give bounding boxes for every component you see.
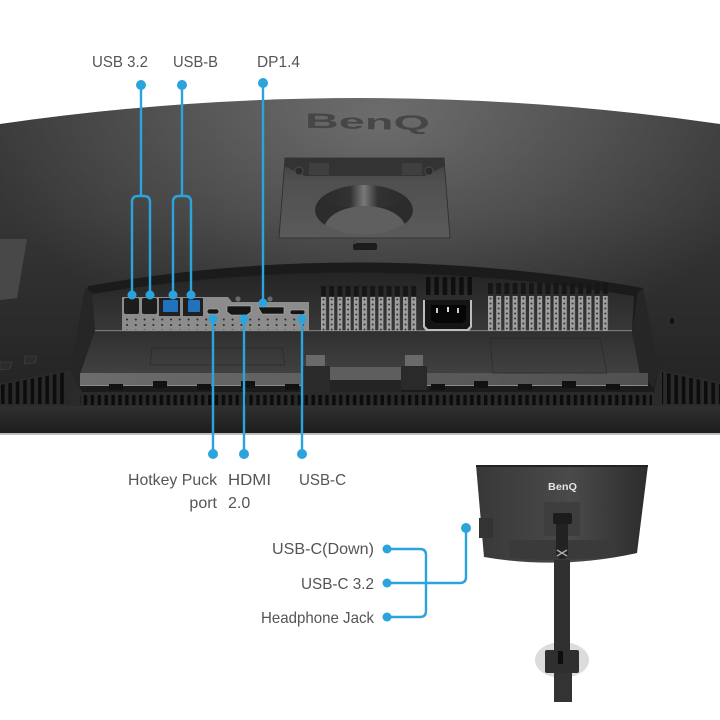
HDMI port (227, 306, 251, 315)
port plate (122, 296, 309, 331)
label: USB-C: USB-C (299, 472, 346, 489)
side port panel (479, 518, 493, 538)
main monitor rear view (0, 98, 720, 435)
VESA mount recess (279, 158, 450, 254)
USB-C port (290, 310, 305, 314)
connector: DP1.4 (258, 78, 268, 308)
label: Hotkey Puck port: Hotkey Puck (128, 472, 218, 489)
label: USB 3.2: USB 3.2 (92, 54, 148, 71)
mini stand bracket (544, 502, 580, 536)
top port labels (92, 54, 300, 71)
label: Headphone Jack: Headphone Jack (261, 610, 375, 627)
perforated vents (321, 283, 610, 331)
connector: USB-C (297, 314, 307, 459)
Hotkey Puck port (207, 309, 219, 314)
label: HDMI 2.0: 2.0 (228, 495, 250, 512)
connector: USB 3.2 (128, 80, 154, 300)
DisplayPort (258, 307, 284, 314)
stand pivot (556, 547, 568, 559)
connector: HDMI 2.0 (239, 314, 249, 459)
lock slot (670, 318, 674, 324)
side buttons (0, 356, 37, 370)
connector: side ports (382, 523, 471, 622)
clamp lower (554, 673, 572, 702)
mount latch (353, 243, 377, 250)
cable clips (109, 381, 620, 390)
bottom vents and band (0, 369, 720, 435)
label: USB-B: USB-B (173, 54, 218, 71)
label: Hotkey Puck port: port (189, 495, 218, 512)
floor label panels (150, 348, 285, 365)
clamp base (545, 650, 579, 673)
lower back panel (509, 540, 617, 560)
small BenQ logo: BenQ (548, 481, 577, 493)
USB-B ports (159, 298, 180, 316)
circular hub (315, 185, 413, 225)
side port callout (261, 523, 471, 627)
monitor back shell (0, 98, 720, 433)
label: USB-C(Down): USB-C(Down) (272, 541, 374, 558)
connector: USB-B (168, 80, 196, 300)
stand neck (554, 560, 570, 655)
bottom port labels (128, 472, 346, 512)
cable recess (70, 262, 658, 392)
label: USB-C 3.2: USB-C 3.2 (301, 576, 374, 593)
label: DP1.4: DP1.4 (257, 54, 300, 71)
label: HDMI 2.0: HDMI (228, 472, 271, 489)
callout connector lines, top and bottom ports (128, 78, 307, 459)
swivel highlight (535, 642, 589, 678)
USB 3.2 ports (124, 298, 139, 314)
left side panel recess (0, 239, 27, 300)
small monitor back (476, 465, 648, 563)
BenQ logo embossed: BenQ (305, 110, 430, 135)
small monitor on stand (476, 465, 648, 702)
connector: Hotkey Puck port (208, 314, 218, 459)
power socket (423, 277, 472, 331)
centre stand blocks (306, 355, 325, 367)
